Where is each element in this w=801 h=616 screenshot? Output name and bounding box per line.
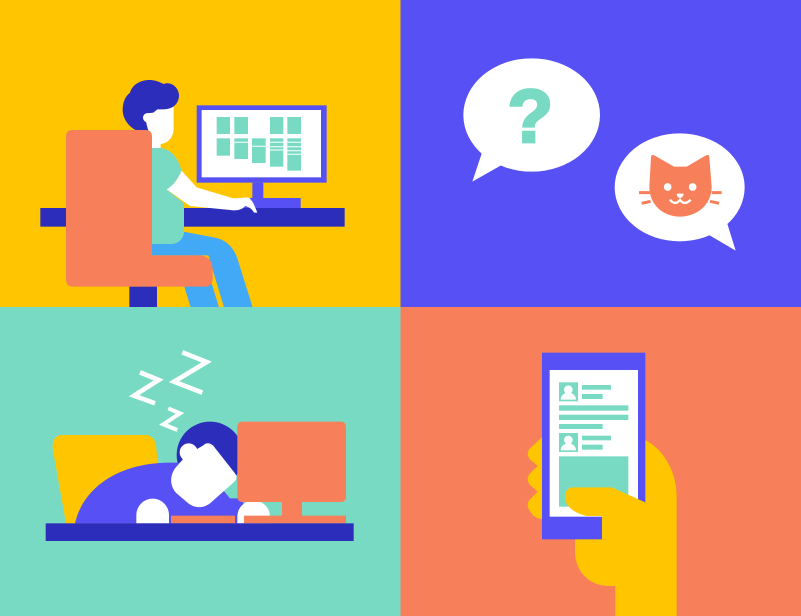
desk	[40, 208, 345, 227]
arm	[167, 171, 257, 213]
chair post	[129, 287, 157, 307]
panel: asleep at desk	[0, 307, 400, 616]
icon: cat	[639, 155, 722, 217]
phone	[542, 353, 645, 539]
keyboard	[171, 516, 235, 523]
hand	[575, 440, 677, 616]
torso	[152, 148, 184, 244]
monitor	[237, 422, 346, 523]
body	[75, 463, 243, 523]
face and neck	[143, 107, 174, 149]
chair	[53, 435, 163, 523]
arm over head	[171, 443, 236, 507]
monitor	[197, 105, 327, 208]
sleep Z letters	[134, 352, 207, 430]
fingers	[528, 436, 543, 519]
panel: working at desk	[0, 0, 400, 307]
question mark: ?	[507, 74, 553, 158]
person at computer scene	[40, 80, 345, 307]
ear	[143, 113, 152, 122]
panel: speech bubbles	[400, 0, 801, 307]
hair	[123, 80, 179, 131]
image placeholder	[559, 456, 628, 507]
desk	[46, 523, 354, 541]
head	[177, 422, 243, 488]
thumb	[565, 487, 657, 540]
question speech bubble	[463, 58, 600, 182]
post text lines	[559, 405, 628, 429]
profile post one	[559, 382, 611, 401]
cat speech bubble	[615, 133, 745, 251]
chair	[66, 130, 213, 287]
profile post two	[559, 433, 611, 452]
panel: phone in hand	[400, 307, 801, 616]
legs	[152, 232, 253, 307]
shoulders and hands	[136, 499, 270, 523]
